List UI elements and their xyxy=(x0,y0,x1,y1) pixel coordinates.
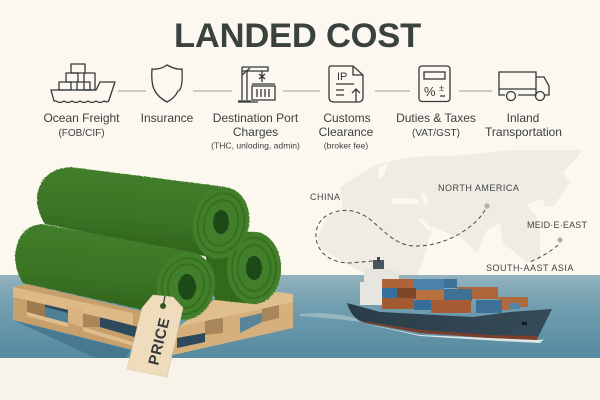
sea xyxy=(0,275,600,358)
labels: duties and taxes: (VAT/GST) xyxy=(412,128,460,139)
labels: destination port charges: Destination Port xyxy=(213,111,299,125)
route: dashed lines xyxy=(316,210,558,263)
labels: inland transportation: Inland xyxy=(507,111,539,125)
icon: port crane xyxy=(238,67,275,102)
wooden pallet xyxy=(13,284,293,358)
connector lines xyxy=(118,90,492,92)
icon: calculator: % xyxy=(424,84,436,99)
icon: truck xyxy=(499,72,549,100)
map labels: MEID·E·EAST xyxy=(527,220,588,230)
icon: shield xyxy=(152,65,182,102)
map labels: SOUTH-AAST ASIA xyxy=(486,263,574,273)
labels: ocean freight: (FOB/CIF) xyxy=(58,128,105,139)
labels: inland transportation xyxy=(485,111,562,139)
hull xyxy=(347,303,552,339)
wake xyxy=(300,313,362,322)
top roll xyxy=(37,167,256,264)
map labels: CHINA xyxy=(310,192,341,202)
pallet left side xyxy=(13,284,145,350)
containers xyxy=(382,279,413,288)
bottom band xyxy=(0,358,600,400)
map labels xyxy=(310,183,588,273)
icon: customs document: IP xyxy=(337,71,347,83)
title: LANDED COST xyxy=(174,17,421,55)
bottom roll xyxy=(15,224,221,325)
turf rolls xyxy=(15,167,281,325)
labels: customs clearance: Customs xyxy=(323,111,371,125)
container ship xyxy=(300,257,552,343)
labels: destination port charges: (THC, unloding, admin) xyxy=(211,140,300,150)
icon: customs document xyxy=(329,66,363,102)
price tag: PRICE xyxy=(145,316,174,367)
labels: inland transportation: Transportation xyxy=(485,125,562,139)
labels: ocean freight: Ocean Freight xyxy=(43,111,120,125)
icon: cargo ship xyxy=(51,64,115,102)
world map xyxy=(317,150,583,275)
labels: ocean freight xyxy=(43,111,120,139)
route endpoints xyxy=(484,203,563,243)
labels: customs clearance: Clearance xyxy=(319,125,374,139)
label: insurance: Insurance xyxy=(141,111,194,125)
superstructure xyxy=(360,269,399,305)
right roll xyxy=(200,230,281,304)
map seas xyxy=(378,162,545,230)
icon: calculator xyxy=(419,66,450,102)
labels: destination port charges xyxy=(211,111,300,150)
labels: duties and taxes: Duties & Taxes xyxy=(396,111,476,125)
price tag xyxy=(127,295,183,377)
labels: customs clearance: (broker fee) xyxy=(324,140,368,150)
labels: duties and taxes xyxy=(396,111,476,139)
icon: calculator: ± xyxy=(439,83,444,93)
labels: customs clearance xyxy=(319,111,374,150)
pallet right side xyxy=(170,292,293,355)
map labels: NORTH AMERICA xyxy=(438,183,519,193)
pallet shadow on sea xyxy=(13,320,130,358)
labels: destination port charges: Charges xyxy=(233,125,278,139)
